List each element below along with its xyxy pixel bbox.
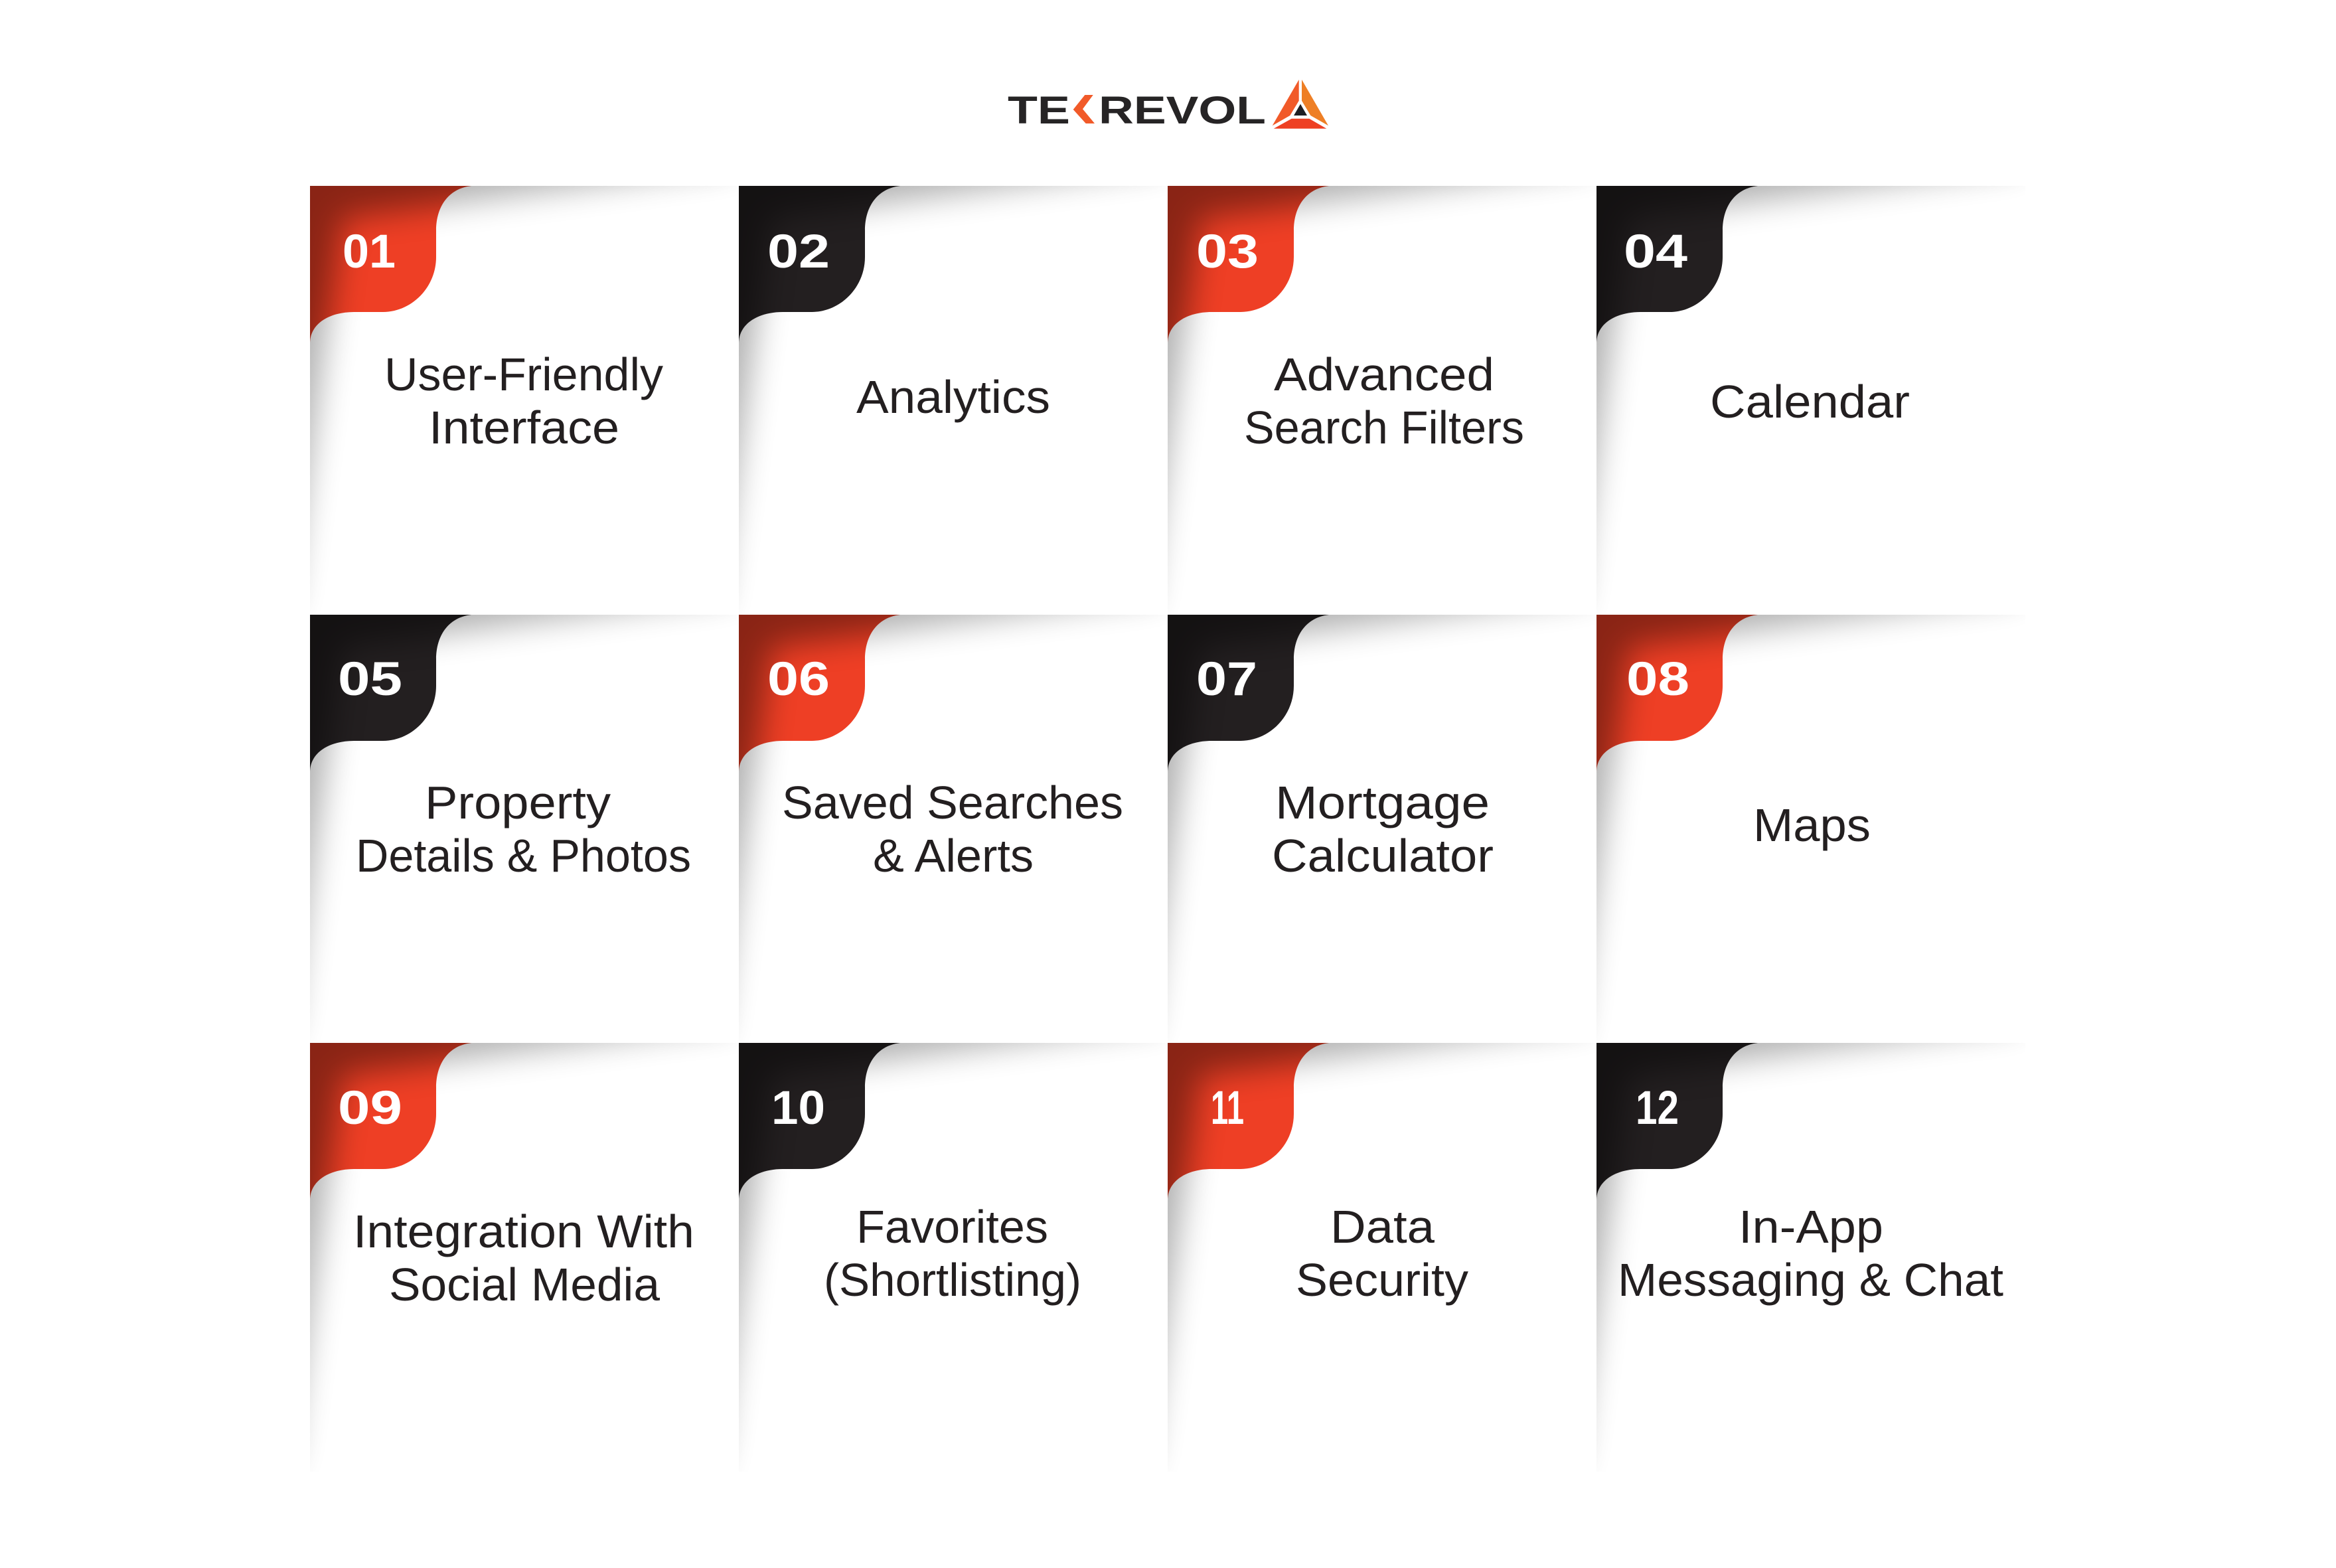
card 05: Property (425, 777, 611, 828)
card 12: 12 (1636, 1082, 1679, 1135)
card 05 (310, 615, 717, 1022)
card 01: Interface (429, 402, 619, 453)
card 05: Details & Photos (356, 830, 691, 882)
card 07: Mortgage (1275, 777, 1490, 828)
card 05: 05 (338, 653, 402, 706)
card 08: 08 (1626, 653, 1689, 706)
card 10 (739, 1043, 1146, 1450)
card 06 (739, 615, 1146, 1022)
card 07: Calculator (1272, 830, 1494, 882)
card 10: (Shortlisting) (824, 1254, 1081, 1306)
logo triangle icon (1273, 80, 1328, 129)
card 09 (310, 1043, 717, 1450)
card 07: 07 (1196, 653, 1257, 706)
card 04: 04 (1624, 226, 1688, 278)
card 04: Calendar (1710, 376, 1910, 428)
card 03: Search Filters (1244, 402, 1524, 453)
card 01: 01 (343, 226, 396, 278)
card 06: Saved Searches (782, 777, 1123, 828)
logo wordmark: TE (1008, 89, 1070, 132)
card 12: In-App (1739, 1201, 1883, 1253)
card 11: 11 (1211, 1082, 1244, 1135)
card 10: 10 (771, 1082, 825, 1135)
card 09: Integration With (353, 1206, 694, 1257)
card 12: Messaging & Chat (1618, 1254, 2003, 1306)
card 11: Data (1330, 1201, 1435, 1253)
card 06: 06 (767, 653, 830, 706)
card 02: 02 (767, 226, 830, 278)
card 12 (1596, 1043, 2003, 1450)
card 11: Security (1296, 1254, 1468, 1306)
card 08 (1596, 615, 2003, 1022)
card 02 (739, 186, 1146, 593)
card 10: Favorites (856, 1201, 1048, 1253)
card 02: Analytics (856, 371, 1050, 423)
card 09: 09 (338, 1082, 402, 1135)
card 01: User-Friendly (384, 349, 663, 400)
card 03: 03 (1196, 226, 1259, 278)
card 03: Advanced (1274, 349, 1494, 400)
card 04 (1596, 186, 2003, 593)
card 09: Social Media (389, 1259, 660, 1310)
card 08: Maps (1753, 799, 1871, 851)
card 07 (1168, 615, 1575, 1022)
card 06: & Alerts (873, 830, 1034, 882)
logo wordmark: REVOL (1099, 89, 1266, 132)
card 11 (1168, 1043, 1575, 1450)
logo: TekRevol (1008, 80, 1328, 132)
card 03 (1168, 186, 1575, 593)
card 01 (310, 186, 717, 593)
logo wordmark (1008, 89, 1266, 132)
